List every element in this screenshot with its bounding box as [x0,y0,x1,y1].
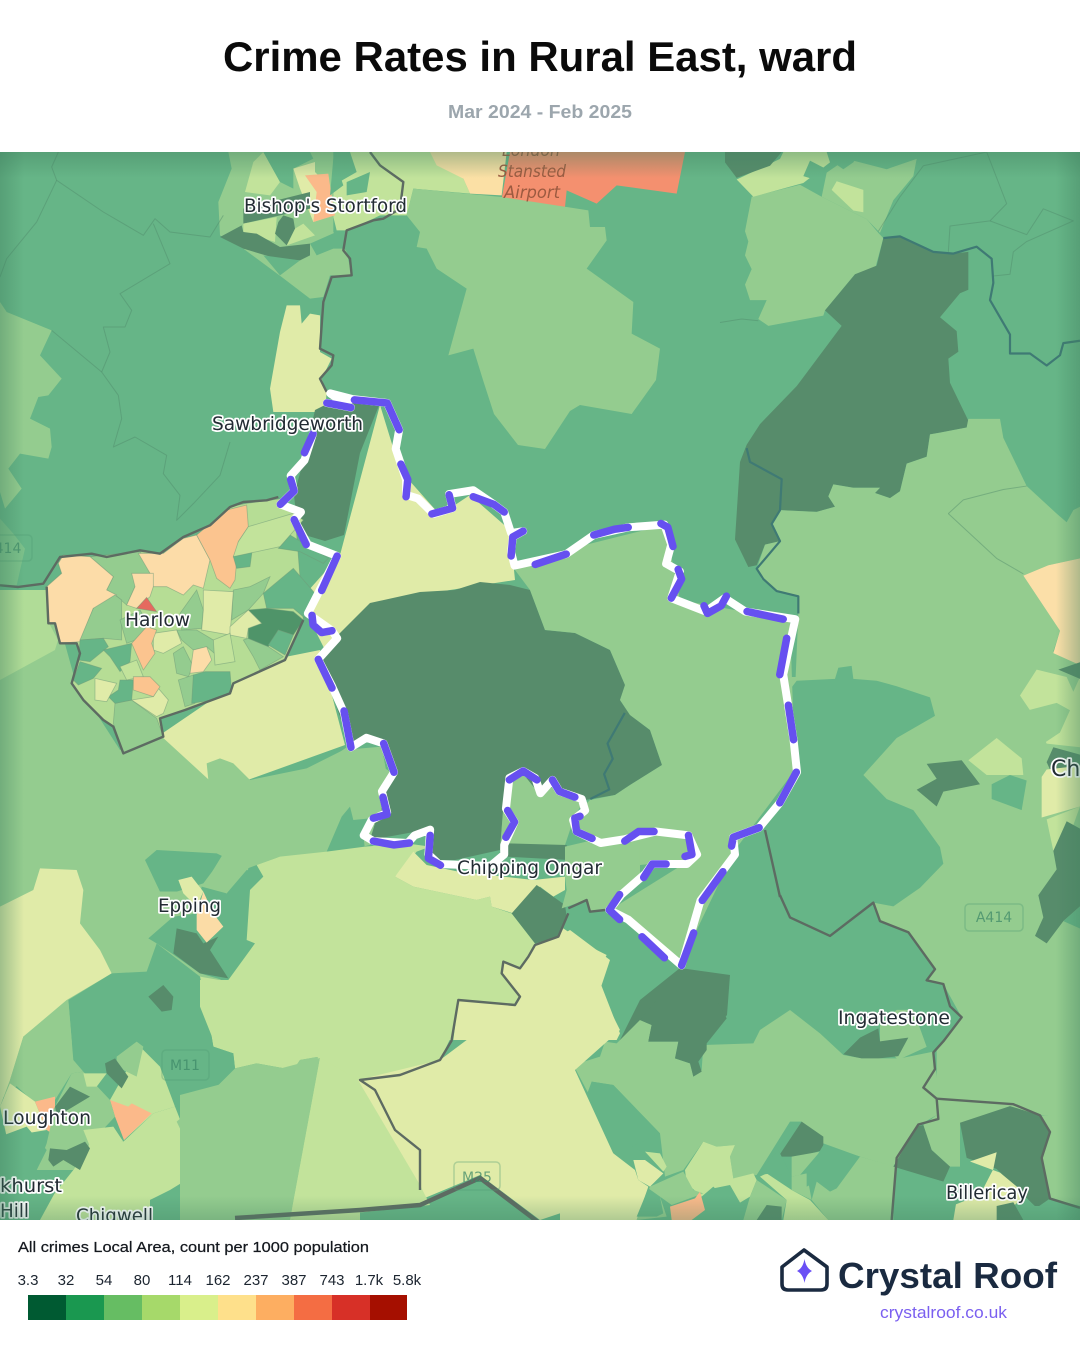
legend colour scale [28,1295,407,1320]
legend tick labels: 5.8k [393,1272,422,1289]
thin parish boundaries [0,152,1073,799]
legend [18,1239,422,1320]
legend tick labels [18,1272,422,1289]
map areas: south of the ward, Chipping Ongar [200,747,640,1040]
road shields [0,535,1023,1190]
label: Bishop's Stortford: Bishop's Stortford [244,195,407,217]
label: Harlow: Harlow [125,609,190,631]
legend tick labels: 3.3 [18,1272,38,1289]
shield: M11 [162,1050,209,1080]
map areas: north-east [725,152,1080,692]
label: Stansted Airport: Stansted [498,162,566,182]
legend heading: All crimes Local Area, count per 1000 population [18,1239,369,1256]
logo wordmark: Crystal Roof [838,1255,1058,1296]
legend tick labels: 54 [96,1272,112,1289]
legend tick labels: 1.7k [355,1272,384,1289]
label: Hill: Hill [0,1200,29,1222]
map areas: central, around the ward [160,400,795,1220]
shield: M25: M25 [462,1170,492,1186]
icon: house with star [782,1250,827,1290]
map areas: north (Bishop's Stortford, Stansted) [218,152,685,449]
label: Chigwell: Chigwell [76,1205,153,1227]
legend tick labels: 32 [58,1272,74,1289]
map edge vignette [0,152,1080,1220]
label: Sawbridgeworth: Sawbridgeworth [212,413,363,435]
title: Crime Rates in Rural East, ward [223,33,857,80]
legend tick labels: 162 [205,1272,231,1289]
label: Chipping Ongar: Chipping Ongar [457,857,602,879]
label: Epping: Epping [158,895,221,917]
shield: A414 east [965,904,1023,931]
label: Ingatestone: Ingatestone [838,1007,950,1029]
map areas: east and south-east [760,662,1080,1220]
label: Billericay: Billericay [946,1182,1028,1204]
legend tick labels: 80 [134,1272,150,1289]
label: Chelmsford (clipped): Ch [1051,757,1080,782]
shield: A414 east: A414 [976,910,1012,926]
shield: M25 [454,1162,500,1190]
label: Buckhurst: khurst [0,1175,62,1197]
shield: M11: M11 [170,1058,200,1074]
Harlow wards [47,498,328,753]
legend tick labels: 114 [168,1272,192,1289]
ward boundary: Rural East [280,393,797,965]
label: Loughton: Loughton [3,1107,91,1129]
map areas: south-west (Epping, Loughton) [0,850,360,1220]
logo: Crystal Roof [782,1250,1058,1322]
website URL: crystalroof.co.uk [880,1304,1008,1322]
legend tick labels: 743 [319,1272,345,1289]
label: Airport: Airport [503,183,561,203]
map areas: south [560,968,960,1220]
map areas: west [0,302,395,1100]
district boundaries and rivers [0,152,1080,1222]
subtitle: date range: Mar 2024 - Feb 2025 [448,102,632,122]
shield: A414 west [0,535,32,561]
label: London (clipped): London [502,141,560,161]
legend tick labels: 237 [243,1272,269,1289]
legend tick labels: 387 [281,1272,307,1289]
